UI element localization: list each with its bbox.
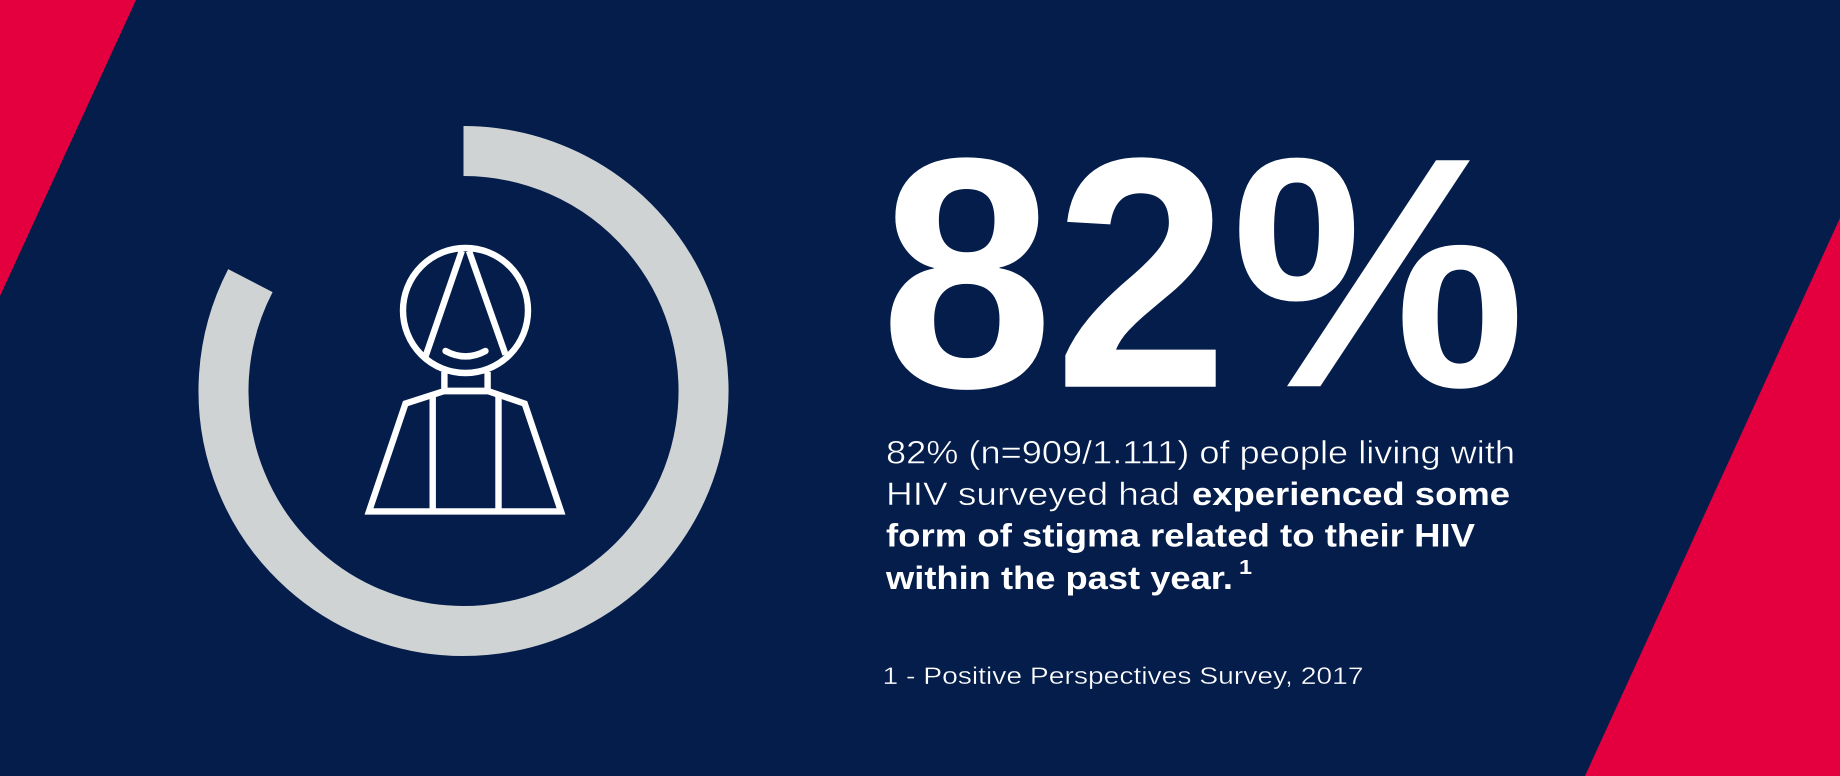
- headline number: %: [1231, 89, 1526, 456]
- icon: right arm line: [495, 396, 502, 511]
- description text block: [885, 434, 1515, 596]
- red corner triangle: bottom right: [1585, 218, 1840, 776]
- icon: head: [403, 248, 528, 373]
- icon: torso: [369, 391, 561, 511]
- headline number: [880, 89, 1526, 457]
- description text block: 82% (n=909/1.111) of people living with: [886, 434, 1515, 470]
- description text block: 1: [1239, 557, 1252, 579]
- icon: person: [369, 248, 561, 511]
- headline number: 8: [880, 90, 1053, 457]
- donut chart: 82 percent ring: [224, 151, 704, 631]
- description text block: within the past year.: [885, 560, 1233, 596]
- description text block: experienced some: [1192, 476, 1510, 512]
- icon: left arm line: [430, 396, 436, 511]
- footnote: 1 - Positive Perspectives Survey, 2017: [882, 663, 1364, 690]
- description text block: form of stigma related to their HIV: [886, 518, 1476, 554]
- headline number: 2: [1054, 90, 1228, 456]
- description text block: HIV surveyed had: [886, 476, 1180, 512]
- icon: neck: [444, 372, 488, 391]
- icon: hair right: [469, 251, 506, 355]
- icon: smile: [446, 351, 486, 356]
- icon: hair left: [426, 251, 462, 356]
- red corner triangle: top left: [0, 0, 136, 296]
